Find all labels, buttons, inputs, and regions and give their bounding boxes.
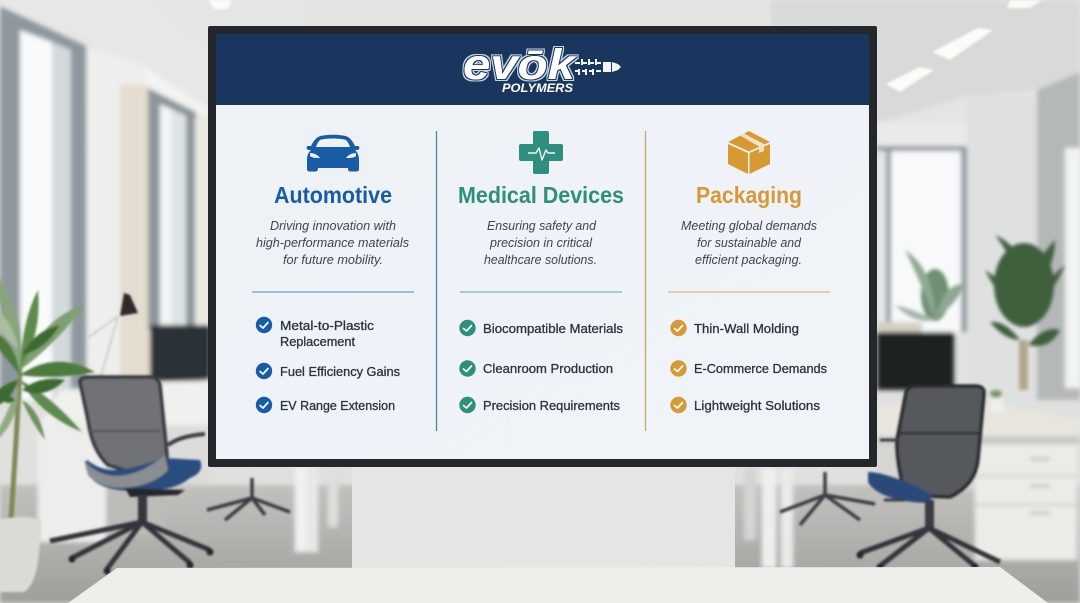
- checklist: medical devices: Biocompatible Materials: [483, 321, 623, 336]
- column: medical devices: [458, 131, 624, 413]
- description: automotive: Driving innovation with: [270, 218, 396, 233]
- column: packaging: [668, 131, 830, 413]
- left desk, monitor and cabinet: [150, 325, 210, 381]
- description: automotive: for future mobility.: [283, 252, 383, 267]
- ceiling lights: [208, 0, 1042, 92]
- checklist: packaging: [670, 320, 827, 413]
- description: packaging: efficient packaging.: [695, 252, 802, 267]
- second chair base, right: [780, 472, 875, 525]
- logo: evok polymers: [463, 41, 621, 95]
- right plants: [895, 235, 1065, 413]
- description: packaging: for sustainable and: [697, 235, 802, 250]
- plant pot: [0, 517, 41, 592]
- column: automotive: [252, 135, 414, 413]
- right window and wall: [877, 122, 967, 332]
- checklist: medical devices: Precision Requirements: [483, 398, 620, 413]
- display screen: [216, 34, 869, 459]
- checklist: automotive: EV Range Extension: [280, 398, 395, 413]
- description: automotive: [256, 218, 409, 267]
- header band: [216, 34, 869, 105]
- second chair base, left: [207, 478, 290, 520]
- checklist: automotive: Metal-to-Plastic: [280, 318, 375, 333]
- heading: automotive: Automotive: [274, 182, 392, 208]
- heading: packaging: Packaging: [696, 182, 802, 208]
- heading: medical devices: Medical Devices: [458, 182, 624, 208]
- checklist: medical devices: [459, 320, 623, 413]
- checklist: packaging: Lightweight Solutions: [694, 398, 821, 413]
- checklist: automotive: Replacement: [280, 334, 355, 349]
- description: automotive: high-performance materials: [256, 235, 409, 250]
- icon: box: [728, 131, 770, 174]
- description: medical devices: [484, 218, 597, 267]
- floor and ceiling tones: [0, 485, 1080, 603]
- logo screw mark: [575, 59, 621, 75]
- logo: evok polymers: evōk: [463, 41, 577, 89]
- icon: car: [307, 135, 359, 172]
- left office chair: [50, 377, 214, 574]
- checklist: automotive: [256, 317, 400, 413]
- left plant: [0, 265, 95, 520]
- right desk, monitor and cabinet: [877, 332, 954, 390]
- description: packaging: Meeting global demands: [681, 218, 817, 233]
- description: medical devices: Ensuring safety and: [487, 218, 597, 233]
- checklist: medical devices: Cleanroom Production: [483, 361, 613, 376]
- left window wall: [88, 46, 148, 400]
- description: medical devices: precision in critical: [489, 235, 593, 250]
- right office chair: [856, 386, 1000, 570]
- logo: evok polymers: POLYMERS: [502, 81, 573, 95]
- checklist: packaging: Thin-Wall Molding: [694, 321, 799, 336]
- description: medical devices: healthcare solutions.: [484, 252, 597, 267]
- display bezel: [208, 26, 877, 467]
- checklist: automotive: Fuel Efficiency Gains: [280, 364, 400, 379]
- desk lamp: [88, 293, 138, 380]
- foreground white table: [68, 567, 1048, 603]
- mounting column: [310, 0, 770, 569]
- checklist: packaging: E-Commerce Demands: [694, 361, 827, 376]
- icon: medical cross: [519, 131, 563, 174]
- description: packaging: [681, 218, 817, 267]
